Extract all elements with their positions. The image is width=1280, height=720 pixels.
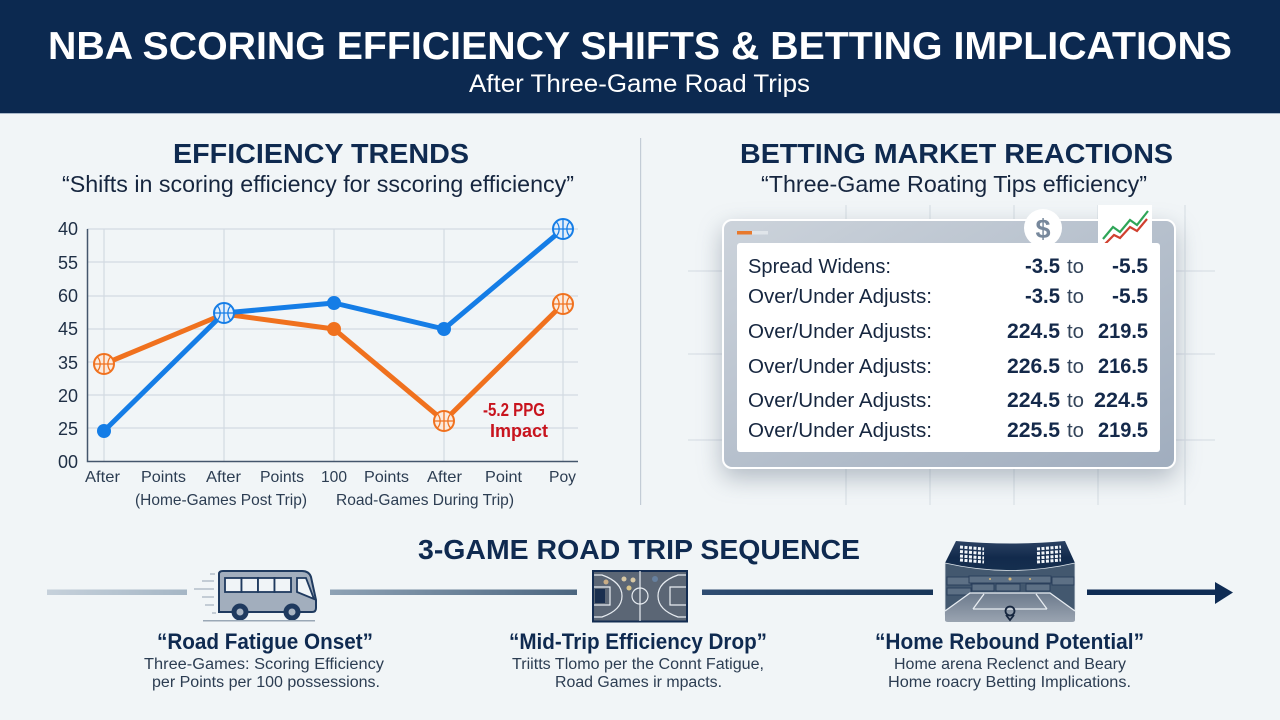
row: over/under 4: 224.5: [1007, 389, 1060, 412]
card tab marks: [737, 231, 768, 234]
row: over/under 5: 225.5: [1007, 419, 1060, 442]
y axis labels: 45: [58, 319, 78, 339]
row: over/under 2: [748, 320, 1148, 343]
row: over/under 3: Over/Under Adjusts:: [748, 356, 932, 378]
x axis labels: 100: [321, 469, 347, 486]
row: over/under 3: 216.5: [1098, 355, 1148, 378]
blue point: [97, 424, 111, 438]
heading: road trip sequence: 3-GAME ROAD TRIP SEQUENCE: [418, 534, 860, 565]
x axis labels: After: [206, 469, 242, 486]
row: over/under 1: to: [1067, 286, 1084, 308]
y axis labels: 60: [58, 286, 78, 306]
x axis labels: Poy: [549, 469, 576, 486]
icon: orange basketball marker: [553, 294, 573, 314]
panel: betting market reactions: [688, 138, 1215, 505]
step: road fatigue onset: Three-Games: Scoring Efficiency: [144, 656, 384, 673]
icon: orange basketball marker: [434, 411, 454, 431]
row: over/under 3: to: [1067, 356, 1084, 378]
row: over/under 5: Over/Under Adjusts:: [748, 420, 932, 442]
chart grid: [87, 229, 578, 462]
x axis labels: Points: [141, 469, 186, 486]
step: road fatigue onset: “Road Fatigue Onset”: [157, 629, 373, 654]
row: spread widens: Spread Widens:: [748, 256, 891, 278]
row: over/under 5: to: [1067, 420, 1084, 442]
x axis labels: Point: [485, 469, 523, 486]
row: spread widens: -3.5: [1025, 255, 1060, 278]
icon: bus: [194, 571, 316, 622]
icon: dollar coin: $: [1035, 214, 1051, 244]
x axis labels: Points: [260, 469, 304, 486]
callout: ppg impact: Impact: [490, 421, 548, 441]
row: spread widens: -5.5: [1112, 255, 1148, 278]
arrow: timeline end: [1087, 582, 1233, 604]
row: over/under 2: Over/Under Adjusts:: [748, 321, 932, 343]
row: over/under 2: 219.5: [1098, 320, 1148, 343]
row: over/under 1: -5.5: [1112, 285, 1148, 308]
step: mid-trip efficiency drop: [509, 629, 767, 691]
step: road fatigue onset: per Points per 100 possessions.: [152, 674, 380, 691]
chart axes: [88, 229, 578, 462]
callout: ppg impact: -5.2 PPG: [483, 400, 545, 420]
orange point: [327, 322, 341, 336]
y axis labels: 55: [58, 253, 78, 273]
icon: home arena: [945, 541, 1075, 622]
icon: blue basketball marker: [214, 303, 234, 323]
heading: betting market reactions: BETTING MARKET REACTIONS: [740, 138, 1173, 169]
x axis labels: Road-Games During Trip): [336, 492, 514, 509]
y axis labels: [58, 219, 78, 472]
title: NBA SCORING EFFICIENCY SHIFTS & BETTING IMPLICATIONS: [48, 25, 1232, 68]
blue point: [437, 322, 451, 336]
timeline segment: [702, 590, 933, 595]
background grid: [688, 205, 1215, 505]
x axis labels: [85, 469, 576, 509]
row: over/under 4: 224.5: [1094, 389, 1148, 412]
panel divider: [640, 138, 641, 505]
header banner: [0, 0, 1280, 114]
step: mid-trip efficiency drop: Road Games ir mpacts.: [555, 674, 722, 691]
subtitle: After Three-Game Road Trips: [469, 70, 810, 98]
row: over/under 1: -3.5: [1025, 285, 1060, 308]
timeline segment: [330, 590, 577, 595]
row: over/under 4: to: [1067, 390, 1084, 412]
row: over/under 2: to: [1067, 321, 1084, 343]
y axis labels: 20: [58, 386, 78, 406]
row: over/under 1: [748, 285, 1148, 308]
step: home rebound potential: “Home Rebound Potential”: [875, 629, 1144, 654]
x axis labels: Points: [364, 469, 409, 486]
heading: efficiency trends: EFFICIENCY TRENDS: [173, 138, 469, 169]
row: over/under 4: Over/Under Adjusts:: [748, 390, 932, 412]
panel: efficiency trends: [58, 138, 578, 509]
blue point: [327, 296, 341, 310]
icon: trend chart: [1098, 205, 1152, 247]
step: home rebound potential: [875, 629, 1144, 691]
timeline segment: [47, 590, 187, 595]
y axis labels: 35: [58, 353, 78, 373]
row: spread widens: to: [1067, 256, 1084, 278]
step: home rebound potential: Home arena Reclenct and Beary: [894, 656, 1126, 673]
subheading: betting market reactions: “Three-Game Roating Tips efficiency”: [761, 171, 1147, 197]
odds table: [737, 243, 1160, 452]
step: road fatigue onset: [144, 629, 384, 691]
panel: road trip sequence: [47, 534, 1233, 691]
line chart: [58, 219, 578, 509]
x axis labels: (Home-Games Post Trip): [135, 492, 307, 509]
icon: basketball court: [593, 571, 687, 622]
x axis labels: After: [427, 469, 463, 486]
callout: ppg impact: [483, 400, 548, 441]
market card: [723, 205, 1175, 468]
x axis labels: After: [85, 469, 121, 486]
row: over/under 4: [748, 389, 1148, 412]
row: over/under 3: [748, 355, 1148, 378]
icon: dollar coin: [1024, 209, 1062, 247]
y axis labels: 40: [58, 219, 78, 239]
step: home rebound potential: Home roacry Betting Implications.: [888, 674, 1131, 691]
row: over/under 3: 226.5: [1007, 355, 1060, 378]
y axis labels: 00: [58, 452, 78, 472]
subheading: efficiency trends: “Shifts in scoring efficiency for sscoring efficiency”: [62, 171, 574, 197]
y axis labels: 25: [58, 419, 78, 439]
row: over/under 5: 219.5: [1098, 419, 1148, 442]
row: over/under 1: Over/Under Adjusts:: [748, 286, 932, 308]
icon: orange basketball marker: [94, 354, 114, 374]
blue series line: [104, 229, 563, 431]
row: over/under 5: [748, 419, 1148, 442]
orange series line: [104, 304, 563, 421]
row: over/under 2: 224.5: [1007, 320, 1060, 343]
row: spread widens: [748, 255, 1148, 278]
icon: blue basketball marker: [553, 219, 573, 239]
step: mid-trip efficiency drop: “Mid-Trip Efficiency Drop”: [509, 629, 767, 654]
step: mid-trip efficiency drop: Triitts Tlomo per the Connt Fatigue,: [512, 656, 764, 673]
